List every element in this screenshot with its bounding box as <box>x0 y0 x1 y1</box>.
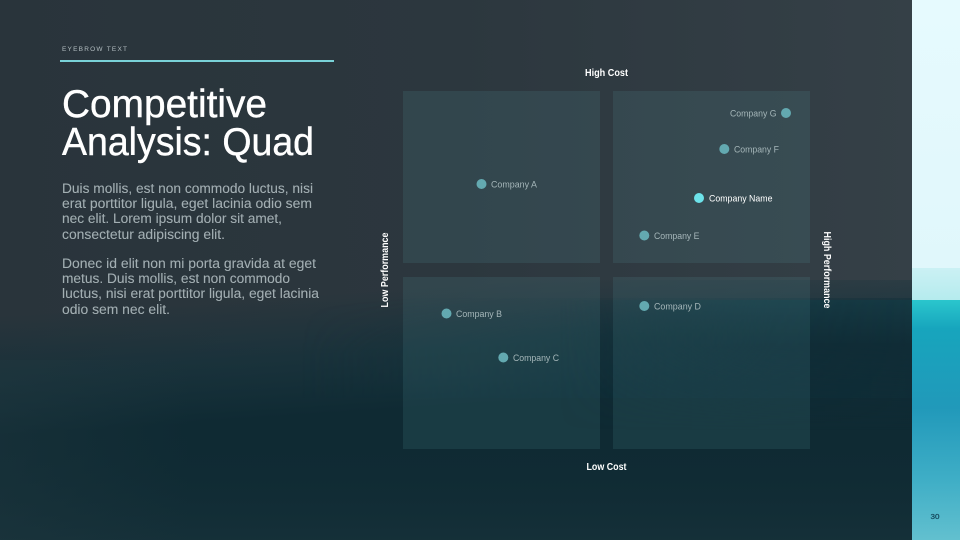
point: Company B <box>442 308 502 320</box>
title: Analysis: Quad <box>62 121 314 164</box>
quadrant: bottom left <box>403 277 600 449</box>
eyebrow: EYEBROW TEXT <box>62 46 129 53</box>
paragraph 1 <box>62 181 313 243</box>
point: Company D <box>639 301 701 312</box>
quadrant: bottom right <box>613 277 810 449</box>
quadrant: top right <box>613 91 810 263</box>
point: Company Name (highlighted): Company Name <box>709 194 772 204</box>
eyebrow rule <box>60 60 334 62</box>
side panel <box>912 0 960 540</box>
point: Company C <box>498 352 559 364</box>
title: Competitive <box>62 83 267 126</box>
axis label: high performance: High Performance <box>821 232 832 309</box>
point: Company A: Company A <box>491 180 538 190</box>
paragraph 1: consectetur adipiscing elit. <box>62 227 225 243</box>
quadrant: top left <box>403 91 600 263</box>
paragraph 1: Duis mollis, est non commodo luctus, nisi <box>62 181 313 197</box>
axis label: low performance: Low Performance <box>380 232 391 308</box>
point: Company E: Company E <box>654 231 700 242</box>
paragraph 2: Donec id elit non mi porta gravida at eget <box>62 256 316 272</box>
point: Company F: Company F <box>734 144 779 156</box>
paragraph 1: erat porttitor ligula, eget lacinia odio sem <box>62 196 312 212</box>
point: Company F <box>719 144 779 156</box>
point: Company G: Company G <box>730 108 776 120</box>
axis label: low cost: Low Cost <box>586 462 627 473</box>
quadrant chart <box>380 68 832 473</box>
point: Company D: Company D <box>654 302 701 312</box>
paragraph 2: luctus, nisi erat porttitor ligula, eget lacinia <box>62 286 319 302</box>
paragraph 2: metus. Duis mollis, est non commodo <box>62 271 290 287</box>
axis label: high cost: High Cost <box>585 68 629 79</box>
title <box>62 83 314 164</box>
page number: 30 <box>930 512 940 521</box>
paragraph 2: odio sem nec elit. <box>62 302 170 318</box>
point: Company B: Company B <box>456 309 502 320</box>
point: Company E <box>639 230 700 242</box>
paragraph 1: nec elit. Lorem ipsum dolor sit amet, <box>62 211 282 227</box>
paragraph 2 <box>62 256 319 318</box>
point: Company C: Company C <box>513 353 559 364</box>
